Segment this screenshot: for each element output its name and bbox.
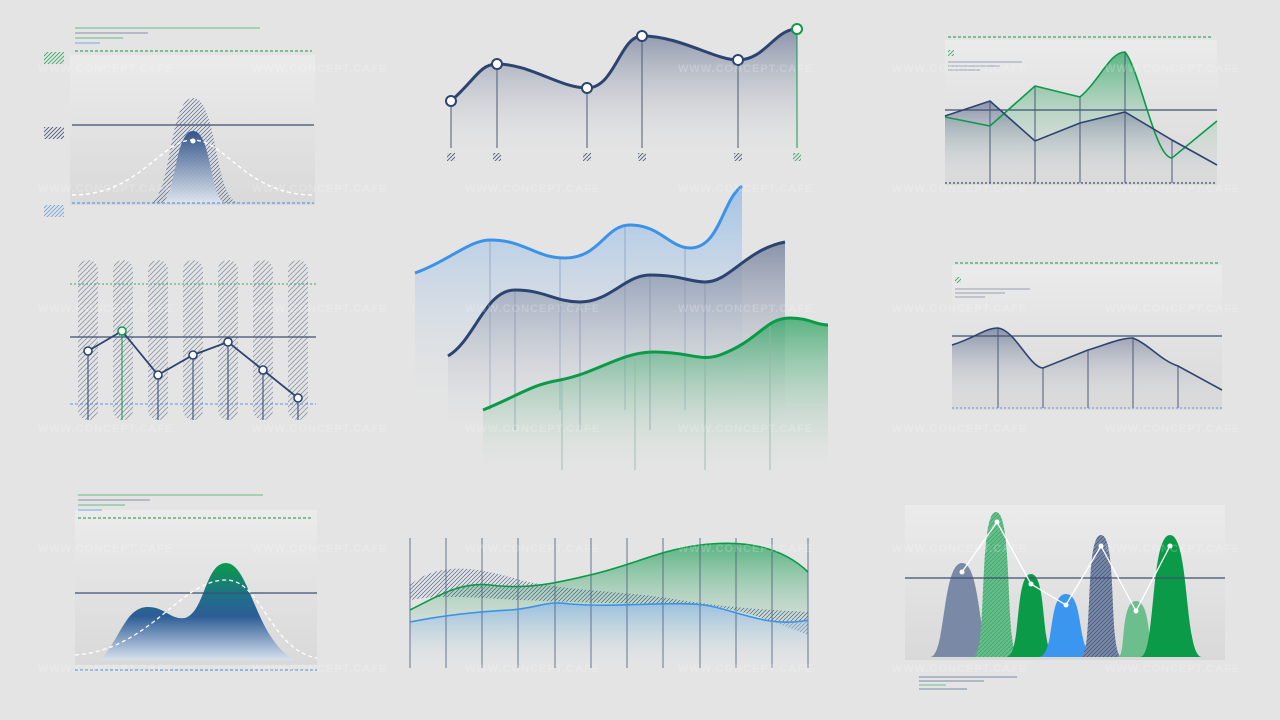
watermark text grid: WWW.CONCEPT.CAFE (678, 423, 813, 435)
watermark text grid: WWW.CONCEPT.CAFE (38, 303, 173, 315)
watermark text grid: WWW.CONCEPT.CAFE (38, 63, 173, 75)
watermark text grid (38, 63, 1240, 675)
panel: stream chart bottom-middle (410, 538, 808, 668)
watermark text grid: WWW.CONCEPT.CAFE (252, 303, 387, 315)
panel: bell curve top-left (44, 28, 315, 217)
watermark text grid: WWW.CONCEPT.CAFE (1105, 663, 1240, 675)
watermark text grid: WWW.CONCEPT.CAFE (1105, 423, 1240, 435)
watermark text grid: WWW.CONCEPT.CAFE (1105, 183, 1240, 195)
watermark text grid: WWW.CONCEPT.CAFE (892, 423, 1027, 435)
watermark text grid: WWW.CONCEPT.CAFE (38, 423, 173, 435)
watermark text grid: WWW.CONCEPT.CAFE (678, 543, 813, 555)
watermark text grid: WWW.CONCEPT.CAFE (892, 63, 1027, 75)
watermark text grid: WWW.CONCEPT.CAFE (252, 423, 387, 435)
watermark text grid: WWW.CONCEPT.CAFE (892, 543, 1027, 555)
watermark text grid: WWW.CONCEPT.CAFE (678, 663, 813, 675)
panel: line chart middle-right (952, 263, 1222, 410)
watermark text grid: WWW.CONCEPT.CAFE (678, 303, 813, 315)
watermark text grid: WWW.CONCEPT.CAFE (252, 543, 387, 555)
watermark text grid: WWW.CONCEPT.CAFE (1105, 303, 1240, 315)
watermark text grid: WWW.CONCEPT.CAFE (252, 63, 387, 75)
watermark text grid: WWW.CONCEPT.CAFE (38, 663, 173, 675)
watermark text grid: WWW.CONCEPT.CAFE (38, 183, 173, 195)
watermark text grid: WWW.CONCEPT.CAFE (892, 183, 1027, 195)
watermark text grid: WWW.CONCEPT.CAFE (678, 63, 813, 75)
watermark text grid: WWW.CONCEPT.CAFE (465, 423, 600, 435)
watermark text grid: WWW.CONCEPT.CAFE (252, 183, 387, 195)
watermark text grid: WWW.CONCEPT.CAFE (892, 663, 1027, 675)
panel: layered 3D area chart center (415, 186, 828, 480)
watermark text grid: WWW.CONCEPT.CAFE (465, 183, 600, 195)
watermark text grid: WWW.CONCEPT.CAFE (1105, 63, 1240, 75)
watermark text grid: WWW.CONCEPT.CAFE (252, 663, 387, 675)
watermark text grid: WWW.CONCEPT.CAFE (465, 543, 600, 555)
panel: area chart top-right (945, 37, 1217, 185)
watermark text grid: WWW.CONCEPT.CAFE (678, 183, 813, 195)
watermark text grid: WWW.CONCEPT.CAFE (465, 663, 600, 675)
watermark text grid: WWW.CONCEPT.CAFE (1105, 543, 1240, 555)
watermark text grid: WWW.CONCEPT.CAFE (465, 303, 600, 315)
panel: peaks chart bottom-right (905, 505, 1225, 689)
panel: double hump area bottom-left (75, 495, 317, 670)
watermark text grid: WWW.CONCEPT.CAFE (38, 543, 173, 555)
panel: line chart top-middle (446, 24, 802, 161)
panel: hatched columns line chart middle-left (70, 260, 316, 420)
watermark text grid: WWW.CONCEPT.CAFE (892, 303, 1027, 315)
